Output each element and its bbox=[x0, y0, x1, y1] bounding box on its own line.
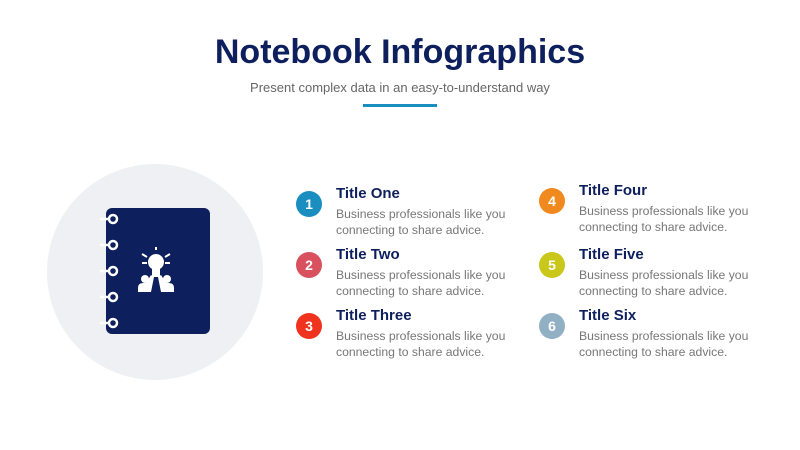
item 6: connecting to share advice. bbox=[579, 345, 727, 359]
icon: notebook bbox=[100, 208, 210, 334]
item 4: connecting to share advice. bbox=[579, 220, 727, 234]
item 6: Title Six bbox=[579, 307, 636, 324]
item 5: 5 bbox=[548, 257, 556, 273]
item 2 bbox=[296, 246, 505, 298]
item 2: Business professionals like you bbox=[336, 268, 505, 282]
item 3: Business professionals like you bbox=[336, 329, 505, 343]
item 2: 2 bbox=[305, 257, 313, 273]
item 1: connecting to share advice. bbox=[336, 223, 484, 237]
item 5 bbox=[539, 246, 748, 298]
underline accent bbox=[363, 104, 437, 107]
item 1: Title One bbox=[336, 185, 400, 202]
item 5: Business professionals like you bbox=[579, 268, 748, 282]
item 6: Business professionals like you bbox=[579, 329, 748, 343]
item 3 bbox=[296, 307, 505, 359]
item 5: Title Five bbox=[579, 246, 644, 263]
item 2: Title Two bbox=[336, 246, 400, 263]
item 4: 4 bbox=[548, 193, 556, 209]
item 4: Title Four bbox=[579, 182, 647, 199]
item 6: 6 bbox=[548, 318, 556, 334]
item 1: Business professionals like you bbox=[336, 207, 505, 221]
subtitle: Present complex data in an easy-to-understand way bbox=[250, 80, 550, 95]
item 6 bbox=[539, 307, 748, 359]
item 3: connecting to share advice. bbox=[336, 345, 484, 359]
item 3: Title Three bbox=[336, 307, 412, 324]
item 1 bbox=[296, 185, 505, 237]
item 5: connecting to share advice. bbox=[579, 284, 727, 298]
background circle bbox=[47, 164, 263, 380]
item 3: 3 bbox=[305, 318, 313, 334]
item 4: Business professionals like you bbox=[579, 204, 748, 218]
item 2: connecting to share advice. bbox=[336, 284, 484, 298]
item 1: 1 bbox=[305, 196, 313, 212]
item 4 bbox=[539, 182, 748, 234]
title: Notebook Infographics bbox=[215, 33, 585, 71]
